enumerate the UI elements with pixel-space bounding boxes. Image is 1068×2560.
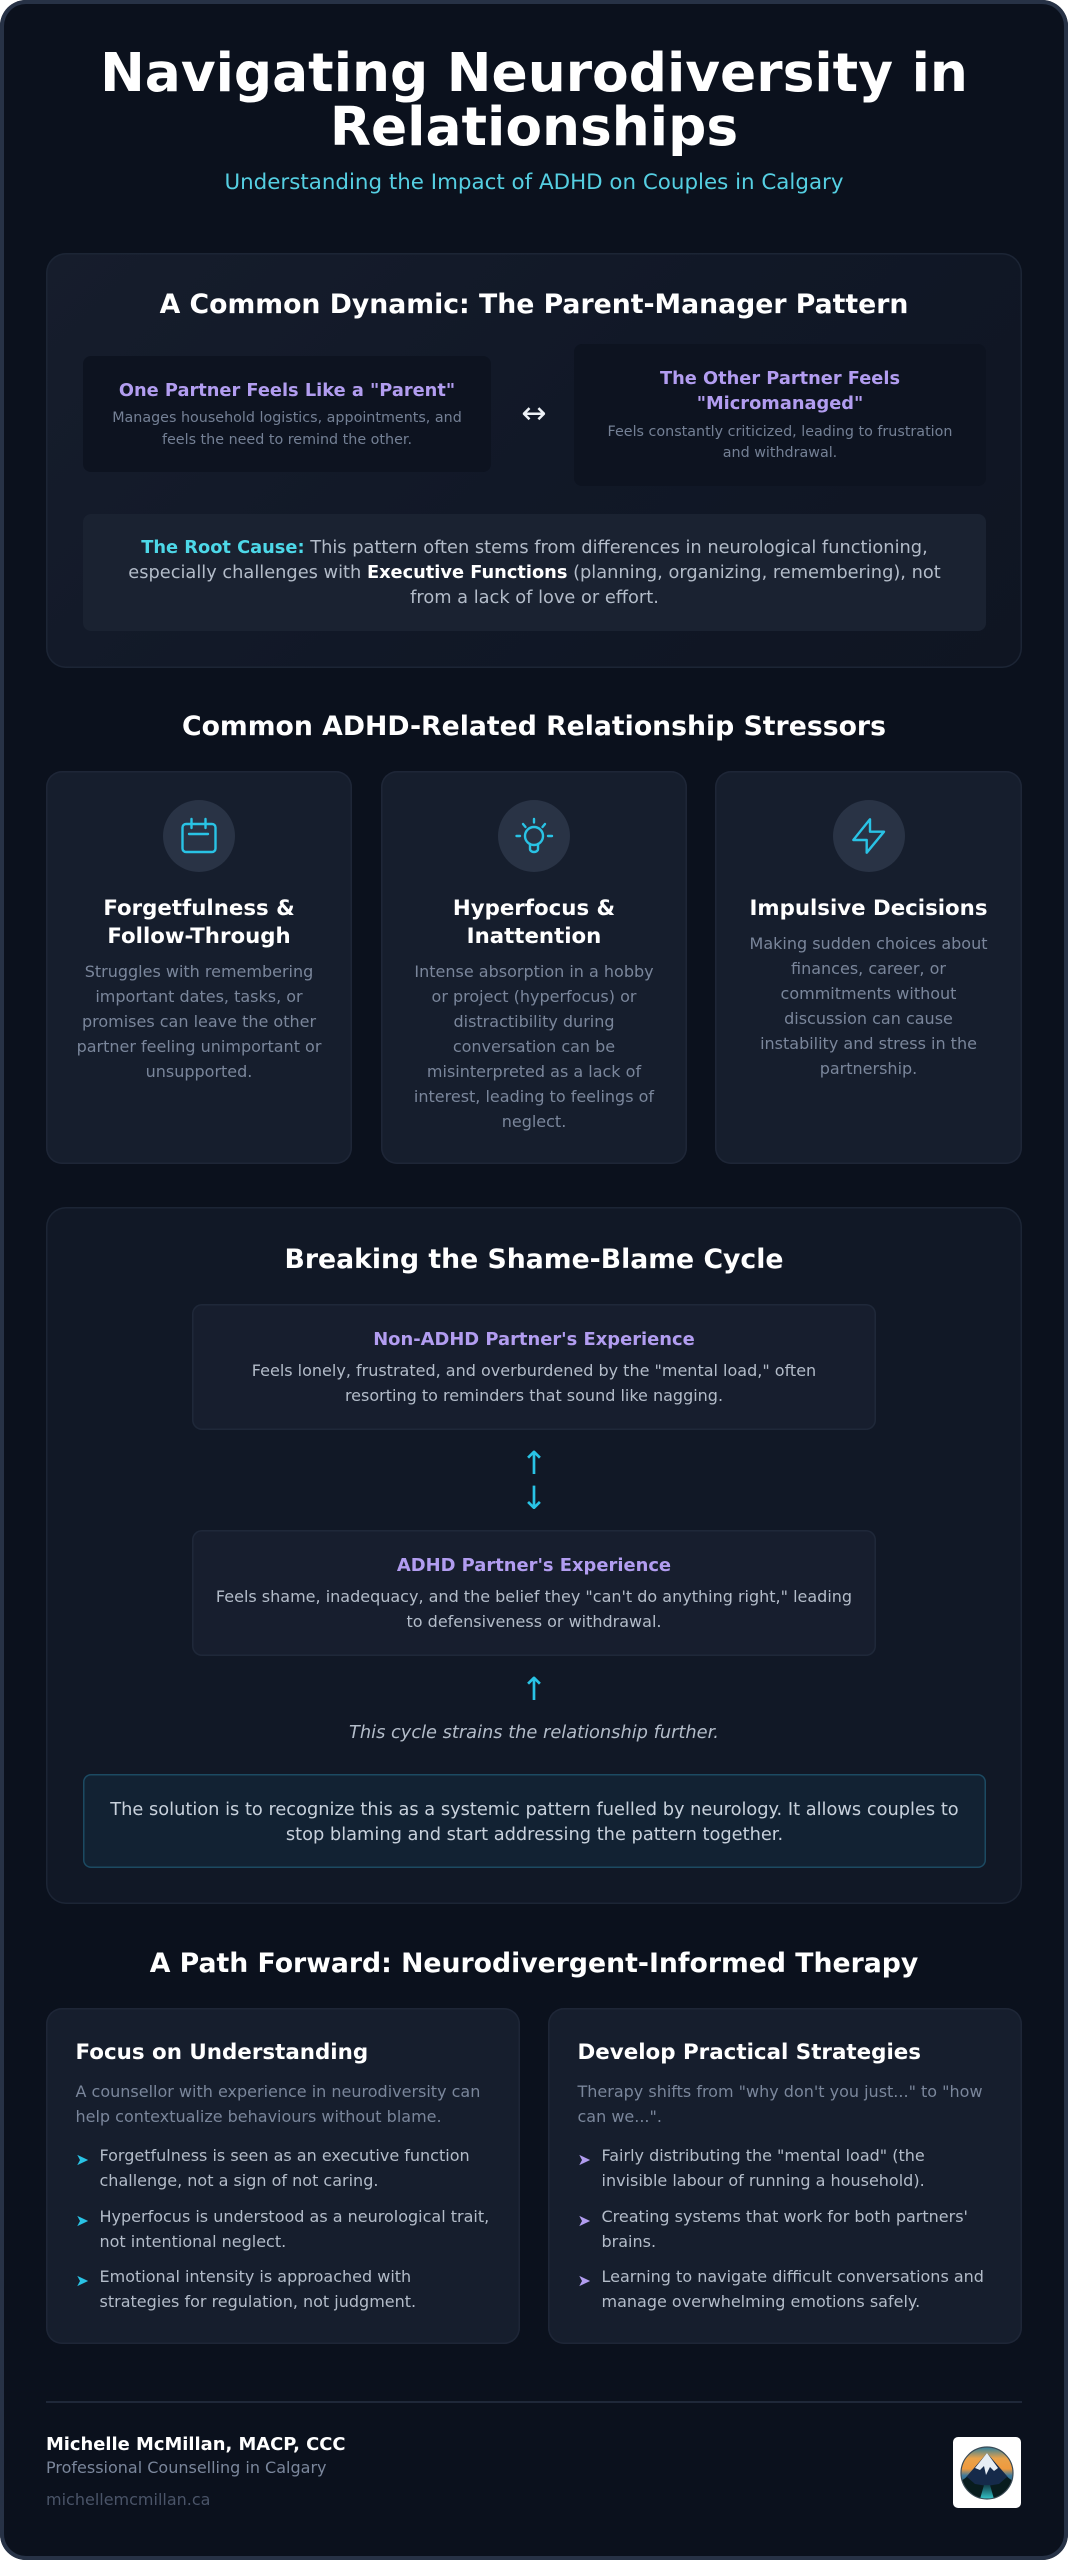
card intro: can we...". xyxy=(578,2106,662,2126)
card: practical strategies: ➤ xyxy=(578,2150,591,2169)
card text: conversation can be xyxy=(453,1037,615,1056)
card title: Impulsive Decisions xyxy=(749,896,988,920)
card: focus on understanding: ➤ xyxy=(76,2271,89,2290)
bullet xyxy=(76,2206,489,2250)
title xyxy=(100,41,968,158)
callout: root cause: from a lack of love or effort. xyxy=(410,587,659,608)
card: focus on understanding: not intentional neglect. xyxy=(100,2232,286,2250)
card text: unsupported. xyxy=(146,1062,252,1081)
card title: Focus on Understanding xyxy=(76,2040,368,2064)
card: focus on understanding: ➤ xyxy=(76,2150,89,2169)
bullet xyxy=(578,2146,925,2190)
box: parent partner: feels the need to remind the other. xyxy=(162,432,412,448)
card text xyxy=(750,934,988,1078)
card: focus on understanding: Forgetfulness is seen as an executive function xyxy=(100,2146,470,2165)
bullet xyxy=(578,2206,968,2250)
card: practical strategies: ➤ xyxy=(578,2271,591,2290)
card: focus on understanding: strategies for regulation, not judgment. xyxy=(100,2292,416,2311)
card: practical strategies: Fairly distributing the "mental load" (the xyxy=(602,2146,925,2165)
box: ADHD partner: Feels shame, inadequacy, and the belief they "can't do anything right," leading xyxy=(216,1586,852,1606)
arrow: cycle up: ↑ xyxy=(521,1670,547,1708)
box: micromanaged partner: Feels constantly criticized, leading to frustration xyxy=(608,424,952,440)
bullet xyxy=(76,2146,470,2190)
icon: calendar xyxy=(163,800,235,872)
callout: solution: stop blaming and start addressing the pattern together. xyxy=(286,1824,783,1844)
bullet xyxy=(76,2267,416,2311)
heading: path forward: A Path Forward: Neurodivergent-Informed Therapy xyxy=(150,1948,918,1978)
callout: root cause: especially challenges with Executive Functions (planning, organizing, remembering), not xyxy=(128,562,941,583)
card text: or project (hyperfocus) or xyxy=(432,987,636,1006)
card text: important dates, tasks, or xyxy=(95,987,303,1006)
box: micromanaged partner xyxy=(574,344,986,486)
card: practical strategies: Learning to navigate difficult conversations and xyxy=(602,2267,984,2286)
callout: root cause: The Root Cause: This pattern often stems from differences in neurological functioning, xyxy=(141,537,928,558)
card text: partnership. xyxy=(820,1059,917,1078)
box: micromanaged partner: and withdrawal. xyxy=(723,445,837,461)
card: practical strategies: ➤ xyxy=(578,2210,591,2230)
card title: Hyperfocus & xyxy=(453,896,615,920)
heading: cycle: Breaking the Shame-Blame Cycle xyxy=(284,1244,784,1274)
box: micromanaged partner: "Micromanaged" xyxy=(697,393,863,414)
title: Navigating Neurodiversity in xyxy=(100,41,968,104)
card: practical strategies: manage overwhelming emotions safely. xyxy=(602,2292,920,2311)
heading: stressors: Common ADHD-Related Relationship Stressors xyxy=(182,710,886,742)
icon: light bulb xyxy=(498,800,570,872)
card text: misinterpreted as a lack of xyxy=(427,1062,641,1081)
card title: Follow-Through xyxy=(107,924,291,949)
footer: author details xyxy=(46,2434,346,2509)
callout: root cause xyxy=(83,514,986,631)
card text: promises can leave the other xyxy=(82,1012,316,1031)
box: non-ADHD partner xyxy=(192,1304,876,1430)
callout: solution xyxy=(83,1774,986,1868)
card text: Intense absorption in a hobby xyxy=(414,962,654,981)
card intro: help contextualize behaviours without blame. xyxy=(76,2106,442,2126)
card title xyxy=(103,896,295,949)
card intro: A counsellor with experience in neurodiversity can xyxy=(76,2082,480,2100)
card text: discussion can cause xyxy=(784,1009,953,1028)
card: practical strategies xyxy=(548,2008,1022,2344)
box: ADHD partner xyxy=(192,1530,876,1656)
box: parent partner: One Partner Feels Like a "Parent" xyxy=(119,380,455,400)
logo xyxy=(953,2437,1021,2508)
subtitle: Understanding the Impact of ADHD on Couples in Calgary xyxy=(224,170,844,194)
card text: Struggles with remembering xyxy=(85,962,313,981)
panel: shame-blame cycle xyxy=(46,1207,1022,1904)
bullet xyxy=(578,2267,984,2311)
callout: solution: The solution is to recognize this as a systemic pattern fuelled by neurology. It allows couples to xyxy=(110,1798,959,1820)
box: micromanaged partner: The Other Partner Feels xyxy=(660,368,900,388)
card: practical strategies: invisible labour of running a household). xyxy=(602,2171,925,2190)
box: non-ADHD partner: Non-ADHD Partner's Experience xyxy=(373,1329,695,1350)
arrow: two-way: ↔ xyxy=(521,396,547,431)
icon: lightning bolt xyxy=(832,800,904,872)
italic note: This cycle strains the relationship further. xyxy=(349,1722,719,1743)
card: practical strategies: Creating systems that work for both partners' xyxy=(602,2206,968,2226)
card text: interest, leading to feelings of xyxy=(414,1087,654,1106)
arrow: down: ↓ xyxy=(521,1479,547,1517)
card text: neglect. xyxy=(502,1112,566,1131)
card intro: Therapy shifts from "why don't you just..." to "how xyxy=(578,2082,983,2100)
panel: parent-manager pattern xyxy=(46,253,1022,668)
card text: instability and stress in the xyxy=(760,1034,977,1053)
card: impulsive decisions xyxy=(715,771,1022,1164)
footer: author details: Michelle McMillan, MACP, CCC xyxy=(46,2434,346,2455)
heading: parent-manager pattern: A Common Dynamic: The Parent-Manager Pattern xyxy=(160,288,908,320)
box: ADHD partner: to defensiveness or withdrawal. xyxy=(407,1612,661,1630)
box: non-ADHD partner: Feels lonely, frustrated, and overburdened by the "mental load," often xyxy=(252,1360,816,1380)
card: focus on understanding: ➤ xyxy=(76,2210,89,2230)
card text: Making sudden choices about xyxy=(750,934,987,953)
card text xyxy=(414,962,654,1131)
card: focus on understanding: Emotional intensity is approached with xyxy=(100,2267,411,2286)
arrow: up: ↑ xyxy=(521,1444,547,1482)
title: Relationships xyxy=(330,95,738,158)
card: focus on understanding: challenge, not a sign of not caring. xyxy=(100,2171,378,2190)
card text: commitments without xyxy=(781,984,956,1003)
box: parent partner xyxy=(83,356,491,472)
card: practical strategies: brains. xyxy=(602,2232,656,2250)
card: focus on understanding: Hyperfocus is understood as a neurological trait, xyxy=(100,2206,489,2226)
card title: Develop Practical Strategies xyxy=(578,2040,921,2064)
card text: finances, career, or xyxy=(791,959,946,978)
card title xyxy=(453,896,615,949)
card: focus on understanding xyxy=(46,2008,520,2344)
box: parent partner: Manages household logistics, appointments, and xyxy=(112,410,462,426)
card text: distractibility during xyxy=(453,1012,615,1031)
footer: author details: Professional Counselling in Calgary xyxy=(46,2458,326,2477)
footer: author details: michellemcmillan.ca xyxy=(46,2490,210,2509)
box: non-ADHD partner: resorting to reminders that sound like nagging. xyxy=(345,1386,723,1404)
box: ADHD partner: ADHD Partner's Experience xyxy=(397,1555,671,1576)
card title: Inattention xyxy=(467,924,601,949)
card intro xyxy=(76,2082,480,2126)
card: hyperfocus xyxy=(381,771,687,1164)
card: forgetfulness xyxy=(46,771,352,1164)
card title: Forgetfulness & xyxy=(103,896,295,920)
card text xyxy=(77,962,322,1081)
card intro xyxy=(577,2082,983,2126)
card text: partner feeling unimportant or xyxy=(77,1037,321,1056)
